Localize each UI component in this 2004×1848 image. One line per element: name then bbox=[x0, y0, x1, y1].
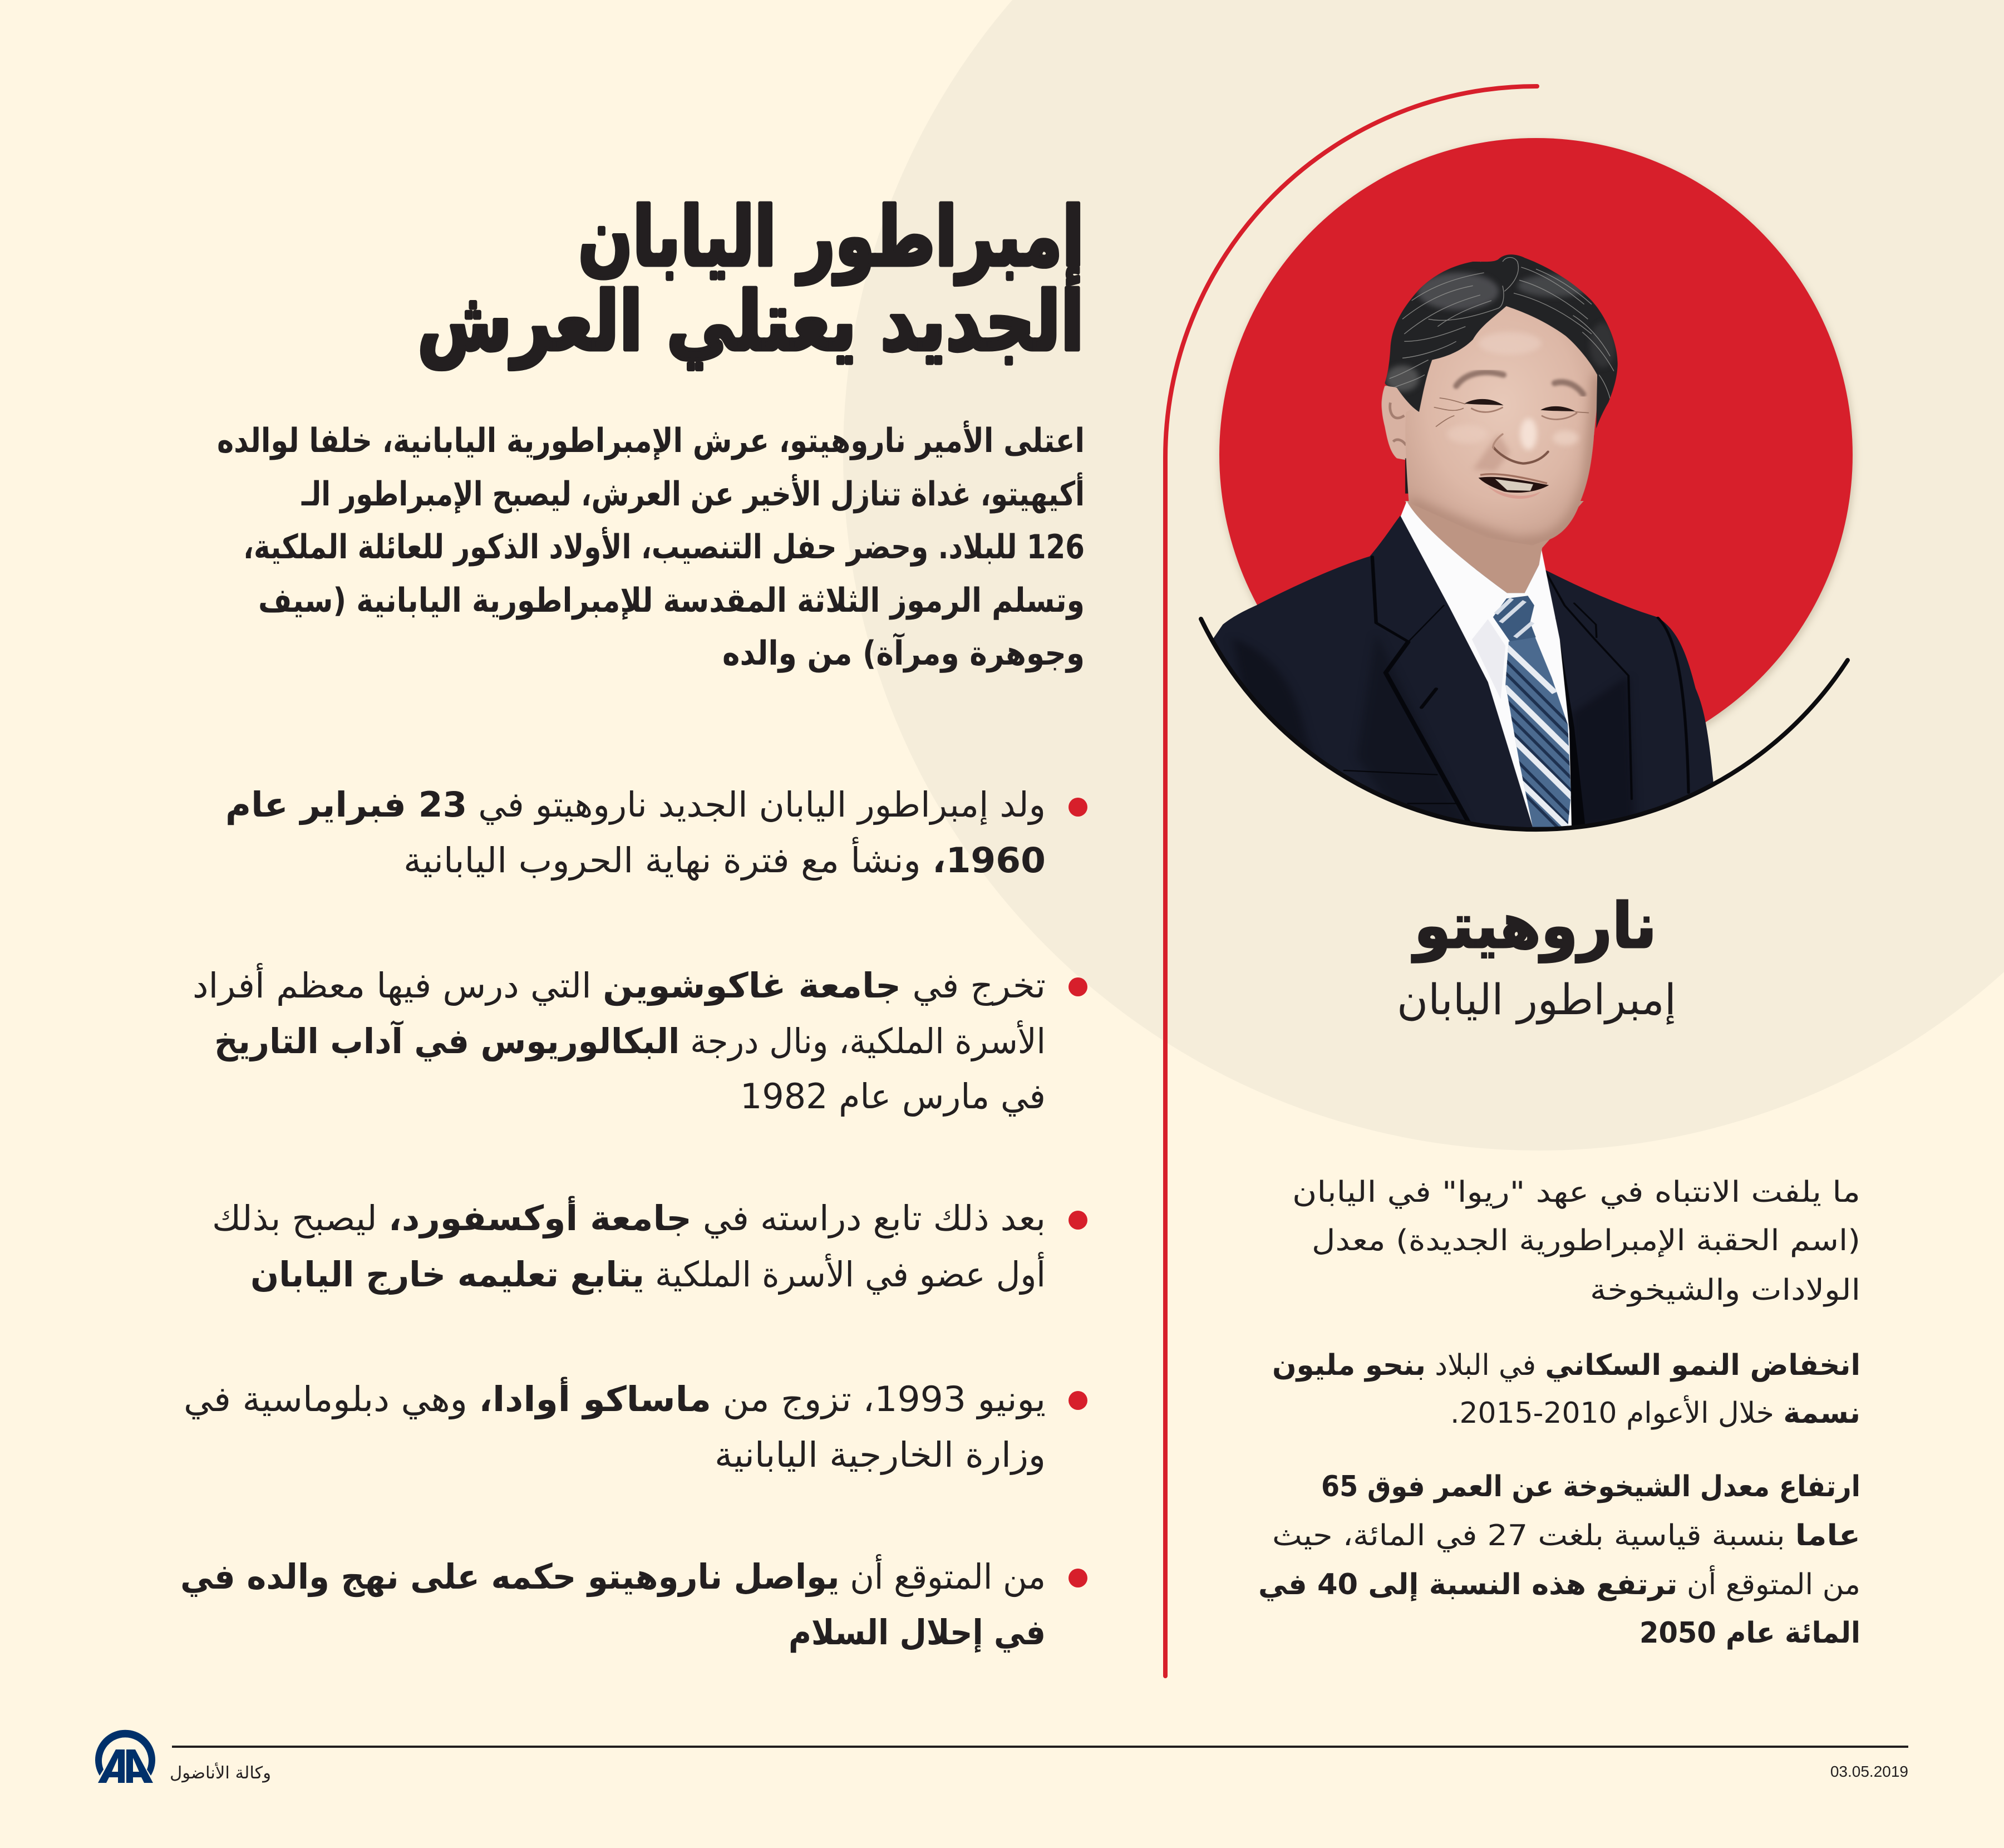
right text block 1: ما يلفت الانتباه في عهد "ريوا" في اليابان bbox=[1292, 1176, 1860, 1209]
intro paragraph bbox=[217, 420, 1085, 673]
bullet dot bbox=[1069, 798, 1087, 817]
title: الجديد يعتلي العرش bbox=[417, 274, 1084, 370]
bullet 4: يونيو 1993، تزوج من ماساكو أوادا، وهي دبلوماسية في bbox=[184, 1377, 1046, 1419]
bullet 1 bbox=[225, 784, 1087, 881]
mouth bbox=[1479, 474, 1549, 499]
black arc under portrait bbox=[1201, 619, 1848, 829]
title: إمبراطور اليابان bbox=[578, 190, 1084, 285]
bullet 5: في إحلال السلام bbox=[789, 1612, 1046, 1653]
right text block 1 bbox=[1292, 1176, 1860, 1307]
black band beside tie bbox=[1560, 641, 1585, 825]
jacket shading bbox=[1232, 633, 1635, 827]
hair bbox=[1385, 254, 1618, 429]
hair streaks bbox=[1386, 255, 1616, 399]
nose bbox=[1493, 434, 1548, 464]
bullet dot bbox=[1069, 1211, 1087, 1230]
bullet 2: في مارس عام 1982 bbox=[740, 1076, 1046, 1117]
right text block 2: انخفاض النمو السكاني في البلاد بنحو مليون bbox=[1272, 1349, 1860, 1382]
intro paragraph: وتسلم الرموز الثلاثة المقدسة للإمبراطورية اليابانية (سيف bbox=[258, 581, 1085, 620]
right text block 3: المائة عام 2050 bbox=[1639, 1616, 1860, 1650]
right text block 3: عاما بنسبة قياسية بلغت 27 في المائة، حيث bbox=[1272, 1519, 1860, 1552]
bullet 3: بعد ذلك تابع دراسته في جامعة أوكسفورد، ليصبح بذلك bbox=[212, 1196, 1046, 1238]
bullet 2: تخرج في جامعة غاكوشوين التي درس فيها معظم أفراد bbox=[193, 963, 1046, 1006]
bullet 2: الأسرة الملكية، ونال درجة البكالوريوس في آداب التاريخ bbox=[214, 1020, 1046, 1061]
ear bbox=[1382, 385, 1422, 461]
jacket bbox=[1207, 516, 1714, 842]
intro paragraph: اعتلى الأمير ناروهيتو، عرش الإمبراطورية اليابانية، خلفا لوالده bbox=[217, 420, 1085, 460]
face bbox=[1405, 302, 1599, 545]
shirt bbox=[1401, 501, 1572, 827]
subtitle: إمبراطور اليابان bbox=[1397, 975, 1676, 1025]
bullet 3 bbox=[212, 1196, 1087, 1295]
face shading bbox=[1409, 332, 1599, 544]
Anadolu Agency logo bbox=[95, 1730, 155, 1783]
intro paragraph: أكيهيتو، غداة تنازل الأخير عن العرش، ليصبح الإمبراطور الـ bbox=[301, 472, 1085, 514]
title bbox=[417, 190, 1084, 370]
eyes bbox=[1434, 398, 1589, 427]
portrait of Naruhito bbox=[1207, 254, 1714, 844]
collar shadow bbox=[1472, 619, 1505, 699]
bullet 4: وزارة الخارجية اليابانية bbox=[715, 1434, 1046, 1475]
right text block 3 bbox=[1258, 1470, 1860, 1650]
bullet 5: من المتوقع أن يواصل ناروهيتو حكمه على نهج والده في bbox=[180, 1554, 1046, 1597]
jacket lapel lines bbox=[1344, 557, 1688, 823]
red arc and vertical divider line bbox=[1165, 86, 1537, 1676]
red sun circle bbox=[1219, 138, 1854, 775]
bullet 1: 1960، ونشأ مع فترة نهاية الحروب اليابانية bbox=[403, 837, 1046, 881]
bullet dot bbox=[1069, 977, 1087, 996]
right text block 1: (اسم الحقبة الإمبراطورية الجديدة) معدل bbox=[1312, 1224, 1860, 1257]
intro paragraph: 126 للبلاد. وحضر حفل التنصيب، الأولاد الذكور للعائلة الملكية، bbox=[243, 527, 1085, 567]
intro paragraph: وجوهرة ومرآة) من والده bbox=[722, 632, 1085, 673]
right text block 3: ارتفاع معدل الشيخوخة عن العمر فوق 65 bbox=[1321, 1470, 1860, 1503]
bullet 5 bbox=[180, 1554, 1087, 1653]
bullet 3: أول عضو في الأسرة الملكية يتابع تعليمه خارج اليابان bbox=[250, 1252, 1046, 1295]
bullet dot bbox=[1069, 1391, 1087, 1410]
footer rule bbox=[172, 1746, 1908, 1748]
jacket buttonhole bbox=[1421, 689, 1436, 707]
hair behind ear bbox=[1405, 458, 1411, 494]
right text block 1: الولادات والشيخوخة bbox=[1590, 1274, 1860, 1307]
right text block 2 bbox=[1272, 1349, 1860, 1430]
large beige background circle bbox=[843, 0, 2004, 1151]
bullet dot bbox=[1069, 1569, 1087, 1587]
eyebrows bbox=[1456, 372, 1583, 394]
agency name: وكالة الأناضول bbox=[170, 1762, 271, 1783]
bullet 1: ولد إمبراطور اليابان الجديد ناروهيتو في 23 فبراير عام bbox=[225, 784, 1046, 825]
bullet 4 bbox=[184, 1377, 1087, 1475]
right text block 3: من المتوقع أن ترتفع هذه النسبة إلى 40 في bbox=[1258, 1565, 1860, 1601]
bullet 2 bbox=[193, 963, 1087, 1117]
date: 03.05.2019 bbox=[1830, 1763, 1908, 1780]
necktie bbox=[1493, 596, 1574, 844]
name: ناروهيتو bbox=[1411, 890, 1657, 963]
neck bbox=[1405, 501, 1584, 593]
right text block 2: نسمة خلال الأعوام 2010-2015. bbox=[1450, 1395, 1860, 1430]
